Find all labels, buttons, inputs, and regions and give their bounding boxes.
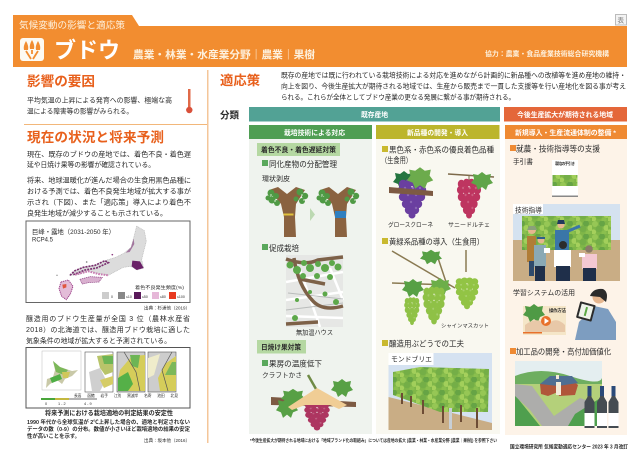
text: adaptation intro: られる。これらが全体としてブドウ産業の更なる発展に繋がる事が期待される。 bbox=[281, 92, 515, 102]
category line: 農業・林業・水産業分野｜農業｜果樹 bbox=[133, 48, 316, 61]
icon: handbook: 栽培の手引き bbox=[555, 161, 575, 166]
index tab bbox=[616, 14, 626, 25]
tag: 着色不良 bbox=[257, 143, 340, 156]
source note 2: 出典：坂本他（2016） bbox=[144, 437, 190, 444]
text: current situation: 示され（下図）、また「適応策」導入により着色不 bbox=[27, 198, 191, 206]
text: 影響の要因 body bbox=[27, 96, 172, 116]
caption: シャインマスカット: シャインマスカット bbox=[441, 322, 489, 330]
text: wine grapes bbox=[26, 314, 190, 345]
figure note: データの数（0-9）の分布。数値が小さいほど栽培適地の結果の安定 bbox=[27, 425, 190, 433]
footnote: *今後生産拡大が期待される地域における「地域ブランド化の取組み」については産地の拡大 (農業・林業・水産業分野 [農業｜果樹]) を参照下さい bbox=[250, 437, 498, 444]
illustration: wine bottles bbox=[584, 386, 618, 428]
map legend: ≤80 bbox=[160, 295, 166, 299]
map panel C bbox=[148, 352, 176, 392]
text: 影響の要因 body: 温による障害等の影響がみられる。 bbox=[27, 106, 133, 116]
label: モンドブリエ: モンドブリエ bbox=[391, 354, 432, 364]
person with tablet bbox=[575, 289, 616, 340]
map panel A bbox=[85, 352, 113, 392]
stability scale: 0 bbox=[45, 402, 47, 406]
illustration: red grape bbox=[448, 172, 494, 218]
illustration: technical guidance bbox=[513, 204, 620, 281]
item: 促成栽培: 促成栽培 bbox=[269, 243, 299, 253]
column heading: 新規導入・生産流通体制の整備 * bbox=[515, 128, 616, 137]
Hokkaido map place labels: 長高 函館 岩手 江別 黒波岸 名寄 池田 北見 bbox=[74, 393, 178, 398]
footer credit: 国立環境研究所 気候変動適応センター 2023 年 3 月改訂 bbox=[510, 442, 629, 450]
caption: 無加温ハウス: 無加温ハウス bbox=[296, 328, 333, 336]
video thumbnail bbox=[523, 304, 566, 335]
map legend: ≤50 bbox=[142, 295, 148, 299]
text: adaptation intro bbox=[281, 70, 626, 102]
item: 果房の温度低下: 果房の温度低下 bbox=[269, 358, 322, 368]
divider left bbox=[24, 124, 207, 125]
divider column bbox=[207, 70, 208, 443]
panel: 新品種の開発・導入 bbox=[376, 125, 500, 434]
band: 今後生産拡大: 今後生産拡大が期待される地域 bbox=[517, 110, 613, 119]
panel: 栽培技術による対応 bbox=[249, 125, 372, 434]
figure: Japan map bbox=[26, 221, 190, 302]
label: クラフトかさ: クラフトかさ bbox=[262, 372, 302, 380]
item: 同化産物: 同化産物の分配管理 bbox=[269, 159, 337, 169]
figure note: 性が高いことを示す。 bbox=[27, 432, 80, 440]
cooperation credit: 協力：農業・食品産業技術総合研究機構 bbox=[485, 49, 609, 58]
text: 影響の要因 body: 平均気温の上昇による発育への影響、極端な高 bbox=[27, 96, 172, 104]
text: wine grapes: 気象条件の地域が拡大すると予測されている。 bbox=[26, 336, 171, 345]
band: 既存産地 bbox=[249, 107, 500, 122]
arrow bbox=[310, 208, 315, 221]
person: white shirt farmer bbox=[554, 241, 571, 281]
text: current situation: 現在、既存のブドウの産地では、着色不良・着色遅 bbox=[27, 150, 191, 158]
stability scale bbox=[41, 398, 97, 406]
icon: handbook bbox=[552, 160, 578, 197]
text: wine grapes: 2018）の北海道では、醸造用ブドウ栽培に適した bbox=[26, 325, 190, 334]
map legend: ≤10 bbox=[126, 295, 132, 299]
item: 加工品: 加工品の開発・高付加価値化 bbox=[516, 346, 611, 356]
map title bbox=[32, 227, 115, 244]
illustration: girdled tree before bbox=[266, 187, 308, 237]
icon: grape emblem bbox=[20, 38, 44, 61]
figure caption: 将来予測における栽培適地の判定結果の安定性 bbox=[45, 408, 174, 417]
item: 促成栽培 bbox=[262, 243, 299, 253]
label: 学習システムの活用: 学習システムの活用 bbox=[513, 288, 575, 297]
map panel Hokkaido bbox=[42, 351, 81, 390]
item: 黒色系 bbox=[381, 144, 494, 165]
icon: thermometer bbox=[186, 89, 192, 113]
column heading: 栽培技術による対応 bbox=[284, 128, 345, 137]
map title: RCP4.5 bbox=[32, 238, 54, 244]
label: 分類: 分類 bbox=[220, 110, 240, 122]
item: 就農: 就農・技術指導等の支援 bbox=[516, 144, 600, 154]
person: instructor bbox=[555, 220, 580, 252]
person: left farmer bbox=[527, 226, 537, 276]
stability scale: 4 - 9 bbox=[84, 402, 92, 406]
text: current situation: おける予測では、着色不良発生地域が拡大する事が bbox=[27, 186, 191, 196]
tag: 着色不良: 着色不良・着色遅延対策 bbox=[261, 145, 336, 154]
map shape bbox=[56, 226, 146, 300]
winery building bbox=[540, 375, 578, 396]
illustration: girdled tree after bbox=[316, 187, 359, 237]
header banner bbox=[13, 15, 627, 67]
column heading: 新品種の開発・導入 bbox=[407, 128, 468, 137]
text: current situation: 将来、地球温暖化が進んだ場合の生食用黒色品種に bbox=[27, 176, 191, 184]
video thumbnail: 操作方法 bbox=[549, 307, 566, 314]
person: pink shirt farmer bbox=[579, 245, 597, 281]
crop name: ブドウ bbox=[54, 38, 120, 63]
index tab: 表 bbox=[618, 16, 624, 24]
text: current situation: 良発生地域が減少することも示されている。 bbox=[27, 208, 167, 218]
text: adaptation intro: 向上を図り、今後生産拡大が期待される地域では、生産から販売まで一貫した支援等を行い産地化を図る事が考え bbox=[281, 82, 626, 90]
caption: サニードルチェ: サニードルチェ bbox=[448, 222, 490, 229]
map legend: ≤100 bbox=[177, 295, 185, 299]
figure: Hokkaido maps bbox=[26, 348, 190, 408]
band: 今後生産拡大 bbox=[504, 107, 627, 122]
source note 1: 出典：杉浦他（2019） bbox=[144, 304, 190, 312]
map legend: 着色不良発生頻度(%) bbox=[135, 284, 185, 291]
text: current situation bbox=[27, 150, 191, 218]
item: 黄緑系: 黄緑系品種の導入（生食用） bbox=[389, 236, 484, 246]
item: 黒色系: （生食用） bbox=[381, 155, 412, 165]
text: adaptation intro: 既存の産地では既に行われている栽培技術による対応を進めながら計画的に新品種への改植等を進め産地の維持・ bbox=[281, 70, 626, 80]
label: 技術指導: 技術指導 bbox=[515, 206, 542, 214]
illustration: Mondobrie vineyard bbox=[388, 353, 492, 430]
map legend bbox=[102, 284, 185, 299]
heading: 影響の要因: 影響の要因 bbox=[27, 73, 95, 89]
label: 手引書: 手引書 bbox=[513, 157, 533, 166]
figure note bbox=[27, 418, 190, 440]
header tab title: 気候変動の影響と適応策 bbox=[19, 20, 125, 32]
heading: 適応策: 適応策 bbox=[220, 72, 260, 88]
tag: 日焼け果対策 bbox=[257, 340, 306, 354]
panel: 新規導入・生産流通体制の整備 bbox=[505, 125, 627, 435]
map panel B bbox=[117, 352, 145, 392]
illustration: purple grape bbox=[389, 167, 433, 218]
item: 醸造用ぶどう: 醸造用ぶどうでの工夫 bbox=[389, 338, 464, 348]
text: current situation: 延や日焼け果等の影響が確認されている。 bbox=[27, 160, 155, 169]
label: 環状剥皮: 環状剥皮 bbox=[262, 174, 290, 183]
illustration: green grapes bbox=[392, 250, 479, 325]
illustration: grape with paper umbrella bbox=[271, 375, 356, 430]
person: farmer with notebook bbox=[534, 236, 550, 281]
illustration: winery bbox=[515, 361, 602, 426]
heading: 現在の状況と将来予測: 現在の状況と将来予測 bbox=[27, 129, 164, 145]
band: 既存産地: 既存産地 bbox=[361, 110, 388, 119]
photo: unheated greenhouse bbox=[286, 255, 343, 327]
stability scale: 1 - 2 bbox=[58, 402, 66, 406]
text: wine grapes: 醸造用のブドウ生産量が全国 3 位（農林水産省 bbox=[26, 314, 190, 323]
map title: 巨峰・露地（2031-2050 年） bbox=[32, 227, 115, 236]
item: 黒色系: 黒色系・赤色系の優良着色品種 bbox=[389, 144, 494, 154]
figure note: 1990 年代から全球気温が 2℃上昇した場合の、適地と判定されない bbox=[27, 418, 190, 426]
map legend: 0 bbox=[111, 295, 113, 299]
caption: グロースクローネ: グロースクローネ bbox=[388, 221, 433, 229]
tag: 日焼け果対策: 日焼け果対策 bbox=[261, 342, 301, 352]
